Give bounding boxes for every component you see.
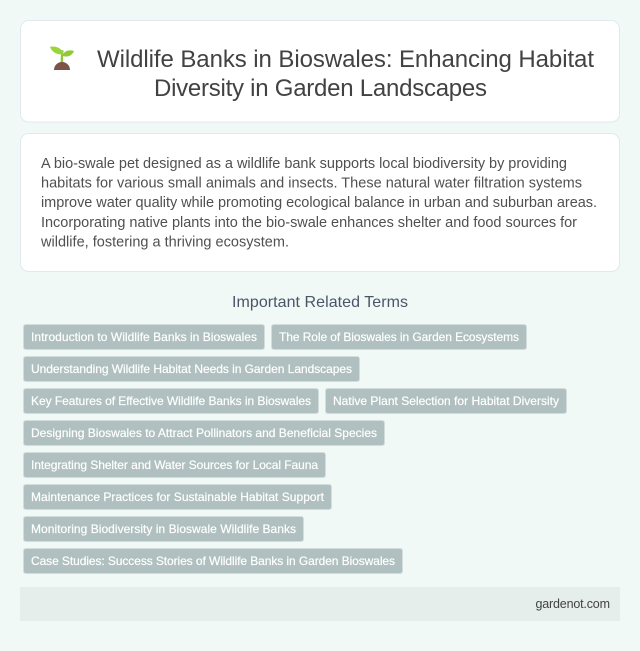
title: Wildlife Banks in Bioswales: Enhancing Habitat: [97, 46, 594, 73]
description text: A bio-swale pet designed as a wildlife bank supports local biodiversity by providing: [41, 156, 567, 172]
chip 7: Integrating Shelter and Water Sources for Local Fauna: [31, 458, 318, 472]
chip 3: [24, 356, 360, 382]
chip 1: Introduction to Wildlife Banks in Bioswales: [31, 330, 257, 344]
chip 4: Key Features of Effective Wildlife Banks in Bioswales: [31, 394, 311, 408]
footer source text: gardenot.com: [536, 597, 610, 611]
description text: Incorporating native plants into the bio-swale enhances shelter and food sources for: [41, 215, 577, 231]
chip 8: [24, 484, 332, 510]
panel: related terms chips: [24, 324, 566, 574]
chip 2: [272, 324, 526, 350]
chip 10: Case Studies: Success Stories of Wildlife Banks in Garden Bioswales: [31, 554, 395, 568]
chip 3: Understanding Wildlife Habitat Needs in Garden Landscapes: [31, 362, 352, 376]
description text: [40, 156, 597, 250]
chip 9: Monitoring Biodiversity in Bioswale Wildlife Banks: [31, 522, 296, 536]
title: Diversity in Garden Landscapes: [154, 75, 487, 102]
chip 7: [24, 452, 326, 478]
chip 4: [24, 388, 318, 414]
description text: improve water quality while promoting ecological balance in urban and suburban areas.: [41, 195, 597, 211]
chip 5: [326, 388, 566, 414]
icon: seedling: [50, 47, 74, 70]
description text: habitats for various small animals and insects. These natural water filtration systems: [41, 176, 582, 192]
chip 6: [24, 420, 384, 446]
chip 10: [24, 548, 402, 574]
panel: description: [20, 134, 620, 272]
footer: [20, 587, 620, 621]
chip 9: [24, 516, 304, 542]
chip 2: The Role of Bioswales in Garden Ecosystems: [279, 330, 519, 344]
heading: important related terms: Important Related Terms: [232, 294, 408, 311]
title: [97, 46, 594, 102]
description text: wildlife, fostering a thriving ecosystem.: [40, 234, 289, 250]
chip 8: Maintenance Practices for Sustainable Habitat Support: [31, 490, 325, 504]
chip 1: [24, 324, 264, 350]
panel: title card: [20, 20, 620, 122]
chip 6: Designing Bioswales to Attract Pollinators and Beneficial Species: [31, 426, 377, 440]
chip 5: Native Plant Selection for Habitat Diversity: [333, 394, 559, 408]
